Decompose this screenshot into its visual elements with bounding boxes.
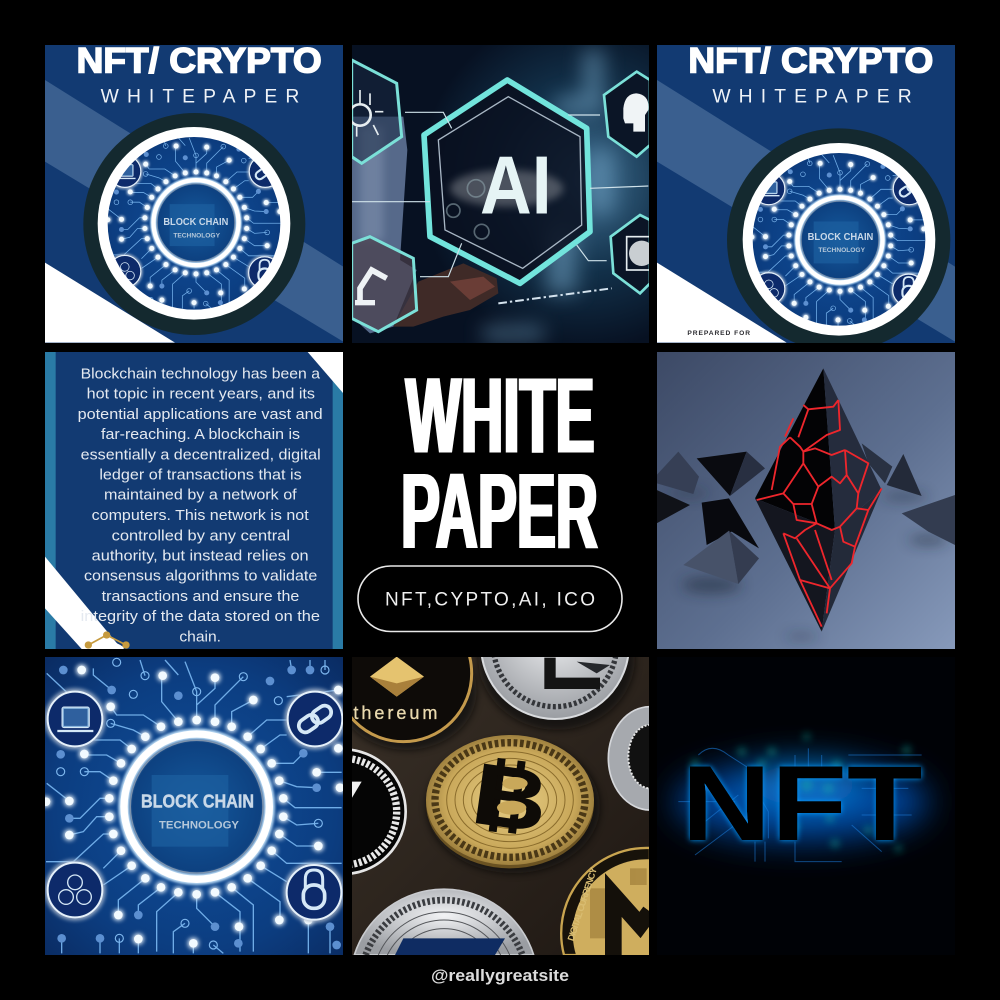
coin: bitcoin: B [466,744,554,851]
gold network icon [85,631,130,649]
light blur columns [483,50,613,340]
circle label: TECHNOLOGY: TECHNOLOGY [173,232,221,239]
coin: silver litecoin [481,571,629,719]
prepared for label: PREPARED FOR [687,330,750,337]
coin: gold digital currency [561,848,650,955]
panel: NFT crypto whitepaper cover right [657,42,955,343]
circle label: TECHNOLOGY: TECHNOLOGY [818,247,866,254]
coin: silver bottom [354,889,534,955]
footer handle: @reallygreatsite [431,967,569,985]
hexagon: robot arm icon [352,237,417,332]
suit sleeve [352,117,417,333]
blue glow [675,762,928,842]
paragraph: integrity of the data stored on the [81,608,320,625]
coin: silver globe [608,707,692,810]
label: BLOCK CHAIN: BLOCK CHAIN [141,791,254,812]
paragraph: computers. This network is not [92,507,310,524]
paragraph: ledger of transactions that is [99,467,302,484]
panel: AI hexagon photo [352,45,649,343]
paragraph: controlled by any central [112,527,290,544]
label: TECHNOLOGY: TECHNOLOGY [159,819,240,831]
label: AI: AI [480,139,552,231]
panel: blockchain technology circuit [45,657,343,955]
coin: ethereum: thereum [353,703,437,723]
panel: NFT crypto whitepaper cover left [45,42,343,343]
paragraph [78,365,323,645]
paragraph: hot topic in recent years, and its [87,386,315,403]
main diamond [755,368,882,632]
title: NFT/ CRYPTO: NFT/ CRYPTO [77,42,322,81]
NFT wordmark: NFT [682,743,923,863]
paragraph: Blockchain technology has been a [81,365,321,382]
circle label: BLOCK CHAIN: BLOCK CHAIN [163,217,228,228]
paragraph: maintained by a network of [104,487,298,504]
connector lines [352,112,648,277]
paragraph: essentially a decentralized, digital [81,446,321,463]
dashed light line [498,288,612,303]
paragraph: chain. [179,628,221,645]
red cracks [757,400,882,627]
panel: blockchain description text [45,352,343,649]
paragraph: authority, but instead relies on [92,547,309,564]
hands [393,263,498,327]
panel: NFT neon logo [657,727,955,874]
hexagon: left top [349,60,402,163]
paragraph: transactions and ensure the [102,588,299,605]
paragraph: potential applications are vast and [78,406,323,423]
panel: broken crystal render [657,352,955,649]
coin: bitcoin [426,735,594,868]
pill tag [358,566,622,632]
hexagon: brain head icon [604,72,650,157]
subtitle: WHITEPAPER: WHITEPAPER [712,87,912,108]
hexagon: main AI [424,80,590,283]
shadows [668,490,948,639]
paragraph: far-reaching. A blockchain is [101,426,300,443]
panel: crypto coins photo [352,657,649,955]
heading: WHITE: WHITE [406,355,595,476]
small pyramids [657,443,955,584]
circuit lines [678,748,922,862]
paragraph: consensus algorithms to validate [84,568,317,585]
circle label: BLOCK CHAIN: BLOCK CHAIN [808,232,873,243]
coin: black and white left [281,749,406,874]
coin: ethereum [335,605,472,742]
coin: gold digital currency: DIGITAL CURRENCY [566,866,599,942]
pill tag: NFT,CYPTO,AI, ICO [385,590,595,610]
heading: PAPER: PAPER [401,450,598,571]
subtitle: WHITEPAPER: WHITEPAPER [101,87,299,108]
hexagon: chip icon [611,215,654,293]
title: NFT/ CRYPTO: NFT/ CRYPTO [688,42,933,81]
